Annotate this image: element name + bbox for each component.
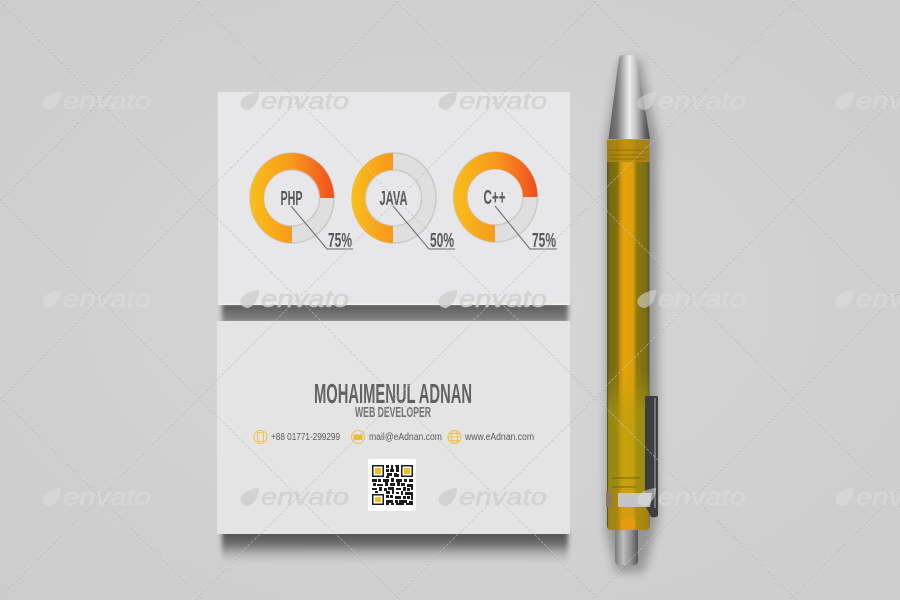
phone number: +88 01771-299299 bbox=[271, 432, 340, 443]
watermark 8: envato bbox=[459, 286, 547, 313]
watermark 10 bbox=[836, 286, 900, 313]
watermark 9 bbox=[638, 286, 746, 313]
watermark 11: envato bbox=[63, 484, 151, 511]
skill donut: PHP bbox=[250, 153, 334, 243]
job title: WEB DEVELOPER bbox=[355, 404, 431, 421]
watermark 3 bbox=[439, 88, 547, 115]
watermark 11 bbox=[43, 484, 151, 511]
card shadows bbox=[222, 303, 568, 566]
leader lines bbox=[291, 206, 557, 249]
percent: C++ 75%: 75% bbox=[532, 230, 556, 252]
website: www.eAdnan.com bbox=[464, 432, 534, 443]
watermark 9: envato bbox=[658, 286, 746, 313]
icon: phone bbox=[254, 430, 267, 444]
pen clip bbox=[645, 396, 658, 517]
pen tip bbox=[608, 55, 650, 139]
watermark 14 bbox=[638, 484, 746, 511]
percent: PHP 75%: 75% bbox=[328, 230, 352, 252]
watermarks on background: envato bbox=[43, 88, 900, 511]
top business card bbox=[218, 92, 570, 305]
watermark 5 bbox=[836, 88, 900, 115]
icon: mail bbox=[352, 430, 364, 444]
watermark 13 bbox=[439, 484, 547, 511]
watermark 8 bbox=[439, 286, 547, 313]
pen shadow bbox=[606, 60, 658, 572]
watermark 1: envato bbox=[63, 88, 151, 115]
skill donut: C++ bbox=[453, 152, 538, 242]
watermark 2: envato bbox=[261, 88, 349, 115]
percent: JAVA 50%: 50% bbox=[430, 230, 454, 252]
name: MOHAIMENUL ADNAN bbox=[314, 378, 472, 409]
pen barrel bbox=[607, 140, 650, 530]
QR code bbox=[368, 459, 416, 511]
watermark 6 bbox=[43, 286, 151, 313]
watermark 1 bbox=[43, 88, 151, 115]
label: C++: C++ bbox=[484, 187, 506, 209]
skill donut: JAVA bbox=[352, 153, 436, 243]
icon: globe bbox=[448, 430, 461, 444]
pen band bbox=[618, 493, 652, 507]
watermark 4: envato bbox=[658, 88, 746, 115]
pen metal end bbox=[615, 525, 638, 565]
label: PHP: PHP bbox=[280, 188, 302, 210]
watermark 14: envato bbox=[658, 484, 746, 511]
watermark 6: envato bbox=[63, 286, 151, 313]
pen bbox=[606, 55, 658, 565]
bottom business card bbox=[217, 321, 570, 534]
watermark 7 bbox=[241, 286, 349, 313]
watermark 3: envato bbox=[459, 88, 547, 115]
watermark 13: envato bbox=[459, 484, 547, 511]
watermark 12 bbox=[241, 484, 349, 511]
watermark 7: envato bbox=[261, 286, 349, 313]
watermark 15 bbox=[836, 484, 900, 511]
watermark 12: envato bbox=[261, 484, 349, 511]
email: mail@eAdnan.com bbox=[369, 432, 442, 443]
watermark 2 bbox=[241, 88, 349, 115]
label: JAVA: JAVA bbox=[380, 188, 408, 210]
watermark 4 bbox=[638, 88, 746, 115]
watermarks on cards: envato bbox=[241, 88, 547, 511]
